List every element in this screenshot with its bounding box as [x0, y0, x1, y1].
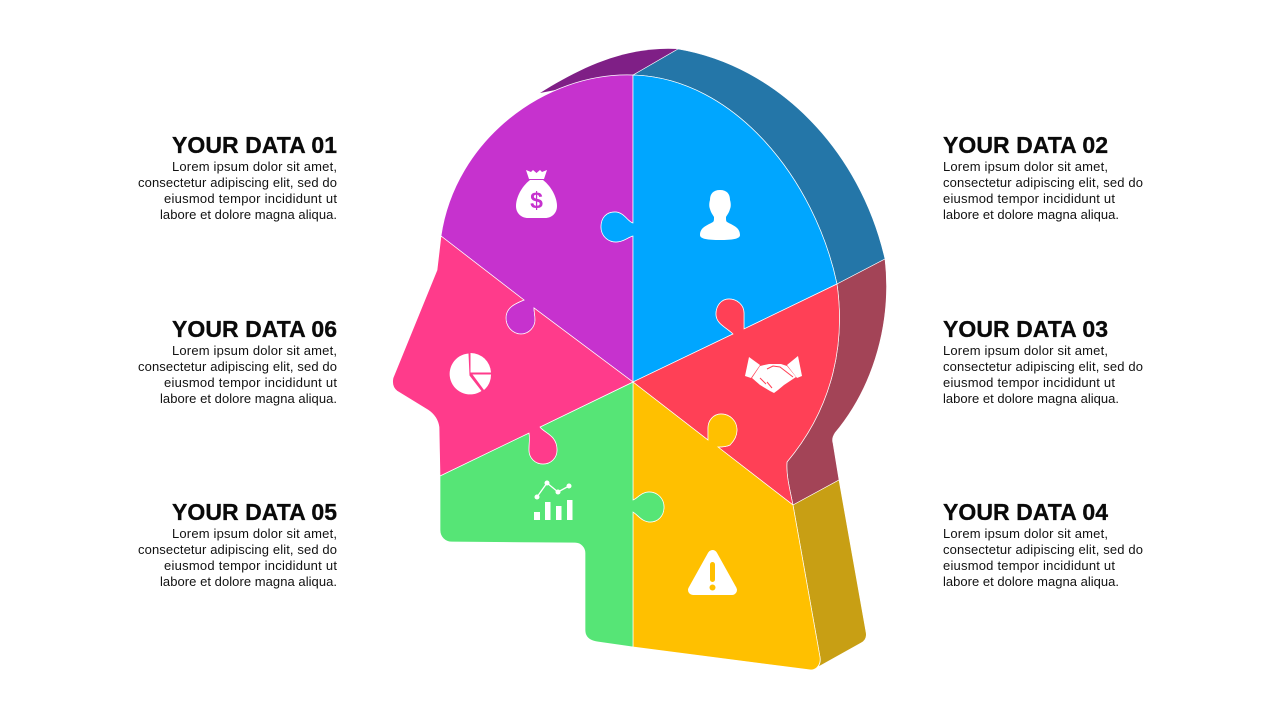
- text block: your data 04: Lorem ipsum dolor sit amet,: [943, 526, 1108, 541]
- text block: your data 06: consectetur adipiscing elit, sed do: [138, 359, 337, 374]
- text block: your data 05: eiusmod tempor incididunt ut: [164, 558, 337, 573]
- icon: line and bar chart: [534, 480, 572, 520]
- icon: warning triangle: [693, 555, 732, 590]
- 3D side: yellow: [793, 480, 866, 667]
- 3D side: blue: [633, 49, 885, 284]
- text block: your data 05: Lorem ipsum dolor sit amet,: [172, 526, 337, 541]
- text block: your data 04: eiusmod tempor incididunt ut: [943, 558, 1115, 573]
- text block: your data 05: YOUR DATA 05: [172, 499, 337, 525]
- text block: your data 04: [943, 499, 1143, 589]
- text block: your data 02: YOUR DATA 02: [943, 132, 1108, 158]
- icon: handshake: [745, 356, 802, 393]
- text block: your data 03: YOUR DATA 03: [943, 316, 1108, 342]
- text block: your data 03: Lorem ipsum dolor sit amet,: [943, 343, 1108, 358]
- text block: your data 02: eiusmod tempor incididunt ut: [943, 191, 1115, 206]
- text block: your data 01: eiusmod tempor incididunt ut: [164, 191, 337, 206]
- text block: your data 01: YOUR DATA 01: [172, 132, 337, 158]
- text block: your data 04: consectetur adipiscing elit, sed do: [943, 542, 1143, 557]
- icon: pie chart: [450, 353, 491, 394]
- text block: your data 05: consectetur adipiscing elit, sed do: [138, 542, 337, 557]
- text block: your data 04: labore et dolore magna aliqua.: [943, 574, 1119, 589]
- icon: money bag: $: [530, 188, 543, 214]
- text block: your data 06: eiusmod tempor incididunt ut: [164, 375, 337, 390]
- text block: your data 05: labore et dolore magna aliqua.: [160, 574, 337, 589]
- puzzle piece: yellow: [633, 382, 820, 670]
- text block: your data 02: Lorem ipsum dolor sit amet,: [943, 159, 1108, 174]
- puzzle piece: purple: [441, 75, 633, 382]
- text block: your data 01: Lorem ipsum dolor sit amet,: [172, 159, 337, 174]
- puzzle piece: pink: [393, 236, 633, 476]
- text block: your data 06: [138, 316, 337, 406]
- text block: your data 04: YOUR DATA 04: [943, 499, 1108, 525]
- text block: your data 01: [138, 132, 337, 222]
- text block: your data 03: eiusmod tempor incididunt ut: [943, 375, 1115, 390]
- text block: your data 03: [943, 316, 1143, 406]
- text block: your data 03: consectetur adipiscing elit, sed do: [943, 359, 1143, 374]
- icon: person: [700, 190, 740, 240]
- text block: your data 05: [138, 499, 337, 589]
- puzzle piece: blue: [601, 75, 837, 382]
- puzzle piece: green: [440, 382, 664, 647]
- text block: your data 03: labore et dolore magna aliqua.: [943, 391, 1119, 406]
- text block: your data 06: Lorem ipsum dolor sit amet,: [172, 343, 337, 358]
- icon: money bag: [516, 170, 557, 218]
- text block: your data 02: labore et dolore magna aliqua.: [943, 207, 1119, 222]
- text block: your data 01: labore et dolore magna aliqua.: [160, 207, 337, 222]
- text block: your data 06: YOUR DATA 06: [172, 316, 337, 342]
- text block: your data 06: labore et dolore magna aliqua.: [160, 391, 337, 406]
- puzzle piece: red: [633, 284, 839, 505]
- text block: your data 02: [943, 132, 1143, 222]
- text block: your data 02: consectetur adipiscing elit, sed do: [943, 175, 1143, 190]
- text block: your data 01: consectetur adipiscing elit, sed do: [138, 175, 337, 190]
- 3D side: red: [787, 259, 887, 505]
- 3D side: purple: [540, 49, 678, 93]
